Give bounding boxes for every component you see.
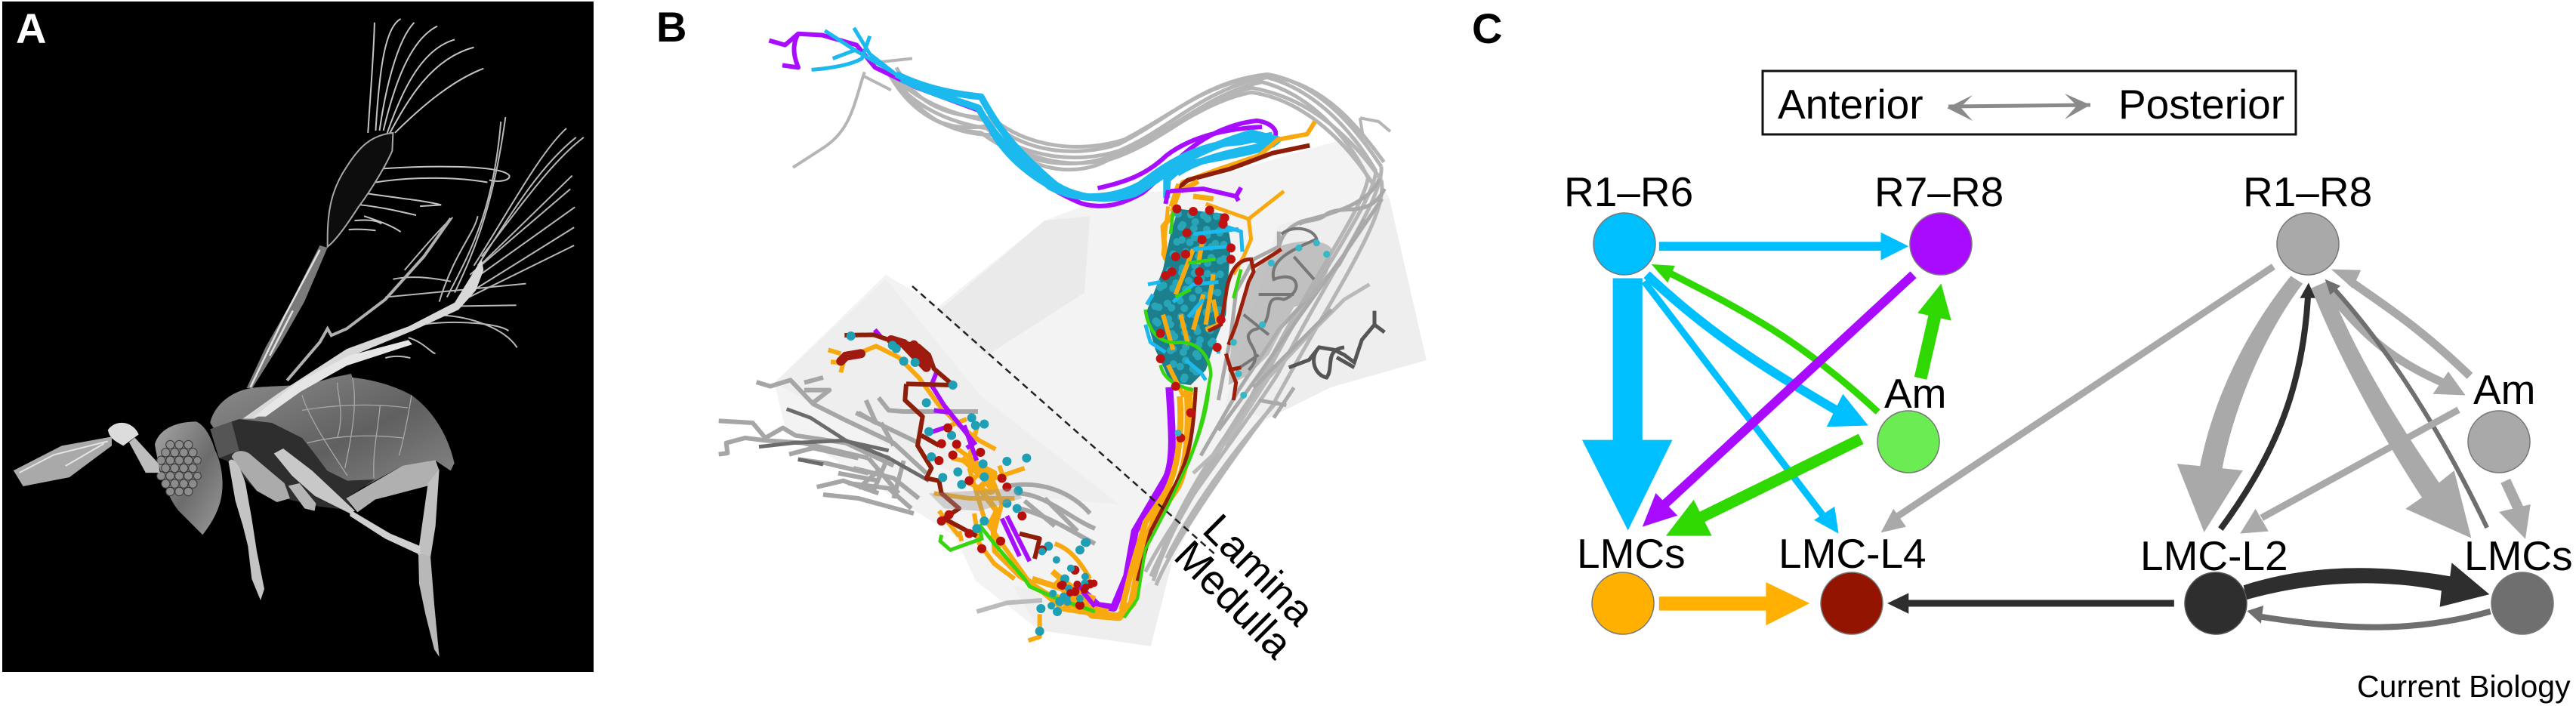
gray branches left bbox=[719, 378, 1095, 612]
label: Lamina: Lamina bbox=[1195, 505, 1324, 634]
node: LMC-L2 bbox=[2185, 572, 2247, 634]
credit: Current Biology: Current Biology bbox=[2357, 669, 2571, 704]
red synapse dots bbox=[939, 428, 1090, 606]
node: R7-R8 bbox=[1910, 213, 1972, 275]
forewing hairs bbox=[349, 19, 510, 232]
arrow: R1-R8 to LMC-L4 bbox=[1880, 267, 2273, 532]
translucent neuropil volumes bbox=[774, 135, 1427, 646]
node label: Am posterior: Am bbox=[2473, 366, 2536, 413]
arrow: LMCs to R1-R8 bbox=[2325, 279, 2487, 528]
node label: LMCs posterior: LMCs bbox=[2464, 532, 2573, 579]
wasp wings bbox=[242, 19, 584, 419]
node: Am anterior bbox=[1877, 411, 1939, 473]
dark isolated neuron bbox=[1289, 311, 1384, 378]
cyan strand at top of cluster bbox=[1167, 174, 1168, 190]
arrow: Am to LMC-L2 bbox=[2240, 410, 2459, 534]
arrow: R1-R6 to LMC-L4 bbox=[1644, 282, 1839, 534]
middle leg coxa bbox=[288, 483, 316, 511]
lower medulla red dots bbox=[1060, 581, 1098, 606]
orange arbor bbox=[828, 346, 1095, 640]
label: Medulla: Medulla bbox=[1166, 532, 1302, 667]
arrow: R1-R6 to R7-R8 bbox=[1659, 233, 1908, 261]
head bbox=[155, 421, 223, 535]
abdomen and thorax top bbox=[210, 374, 455, 496]
arrow: Am to R1-R8 bbox=[2331, 270, 2470, 376]
hindwing stems bbox=[242, 259, 483, 419]
teal synapse dots in lamina bbox=[1150, 214, 1229, 380]
compound eye bbox=[157, 440, 201, 496]
hindwing fan hairs bbox=[385, 117, 584, 358]
arrow: R1-R8 to LMC-L2 bbox=[2177, 276, 2303, 532]
node: LMC-L4 bbox=[1821, 572, 1883, 634]
red synapse dots in lamina bbox=[1161, 209, 1231, 438]
panel letter A: A bbox=[16, 5, 46, 52]
maroon arbor bbox=[844, 335, 1040, 559]
orange strands around cluster bbox=[1163, 181, 1284, 274]
node: LMCs anterior bbox=[1592, 572, 1654, 634]
green strands in cluster bbox=[1146, 211, 1241, 463]
gray strands lower right bbox=[1193, 179, 1384, 473]
green neuron bbox=[940, 525, 1095, 612]
node label: R1-R6: R1–R6 bbox=[1564, 168, 1693, 215]
hind leg bbox=[274, 449, 440, 657]
node label: LMC-L2: LMC-L2 bbox=[2140, 532, 2288, 579]
arrow: LMCs to LMC-L2 bbox=[2247, 606, 2491, 627]
gray tangle texture bbox=[1236, 229, 1316, 370]
arrow: R1-R6 to Am bbox=[1647, 275, 1868, 427]
panel B: reconstructed neurons bbox=[656, 3, 1427, 667]
purple neuron strands bbox=[769, 34, 1276, 206]
teal synapse mass base bbox=[1146, 209, 1231, 385]
maroon thick segments bbox=[841, 340, 929, 368]
arrow: Am to LMCs bbox=[1666, 439, 1861, 536]
node: R1-R6 bbox=[1593, 213, 1655, 275]
arrow: Am to R7-R8 bbox=[1917, 284, 1951, 378]
anterior network arrows bbox=[1582, 233, 2273, 625]
right lamina detail bbox=[1146, 174, 1384, 473]
orange strands through cluster bbox=[1163, 236, 1218, 395]
panel A: wasp micrograph bbox=[2, 2, 594, 672]
translucent gray over medulla bbox=[929, 489, 1022, 511]
purple strands bbox=[875, 330, 1095, 606]
lower medulla synapse dots bbox=[1042, 543, 1098, 608]
medulla detail bbox=[719, 330, 1095, 640]
panel letter C: C bbox=[1472, 5, 1502, 52]
node label: LMCs anterior: LMCs bbox=[1577, 530, 1686, 577]
node: LMCs posterior bbox=[2491, 572, 2553, 634]
arrow: LMCs to LMC-L4 bbox=[1659, 582, 1809, 625]
dark gray branches bbox=[759, 409, 929, 481]
arrow: LMC-L2 to R1-R8 bbox=[2220, 282, 2315, 529]
abdomen veins bbox=[302, 378, 412, 478]
panel C: connectivity diagrams bbox=[1472, 5, 2573, 634]
arrow: LMC-L2 to LMCs bbox=[2244, 563, 2489, 607]
front leg bbox=[229, 451, 290, 600]
gray neuron bundle, upper bbox=[793, 59, 1390, 585]
upper neuron bundles bbox=[769, 28, 1427, 646]
teal dots on gray tangle bbox=[1178, 243, 1327, 433]
gray dense tangle bbox=[1229, 242, 1331, 385]
teal synapse dots bbox=[851, 336, 1086, 631]
legend text: Posterior: Posterior bbox=[2118, 81, 2284, 128]
legend double arrow bbox=[1947, 94, 2090, 121]
neuron shafts bbox=[1055, 122, 1315, 618]
node label: LMC-L4: LMC-L4 bbox=[1779, 530, 1927, 577]
node label: Am anterior: Am bbox=[1884, 370, 1947, 417]
legend text: Anterior: Anterior bbox=[1778, 81, 1924, 128]
arrow: R1-R6 to LMCs bbox=[1582, 279, 1672, 530]
legend: anterior-posterior bbox=[1763, 71, 2296, 134]
arrow: R7-R8 to LMCs bbox=[1643, 275, 1914, 527]
thorax dark side bbox=[210, 419, 375, 511]
node label: R1-R8: R1–R8 bbox=[2243, 168, 2372, 215]
node label: R7-R8: R7–R8 bbox=[1874, 168, 2004, 215]
arrow: Am to LMCs bbox=[2499, 481, 2531, 539]
arrow: R1-R8 to LMCs bbox=[2312, 282, 2471, 538]
wasp antenna bbox=[14, 423, 160, 486]
posterior network arrows bbox=[2177, 270, 2531, 627]
maroon neuron bbox=[1208, 249, 1282, 400]
arrow: LMC-L2 to LMC-L4 bbox=[1887, 593, 2174, 614]
purple strand at top of cluster bbox=[1165, 187, 1241, 204]
arrow: R1-R8 to Am bbox=[2330, 293, 2466, 396]
cyan strands over cluster bbox=[1146, 227, 1242, 380]
wasp body bbox=[155, 374, 455, 657]
cyan neuron bundle bbox=[812, 28, 1278, 199]
forewing blade bbox=[328, 133, 393, 247]
panel letter B: B bbox=[656, 3, 686, 51]
forewing stalk bbox=[247, 245, 328, 388]
lamina-medulla boundary bbox=[912, 286, 1217, 556]
node: R1-R8 bbox=[2277, 213, 2339, 275]
node: Am posterior bbox=[2468, 411, 2530, 473]
arrow: Am to R1-R6 bbox=[1652, 264, 1878, 412]
